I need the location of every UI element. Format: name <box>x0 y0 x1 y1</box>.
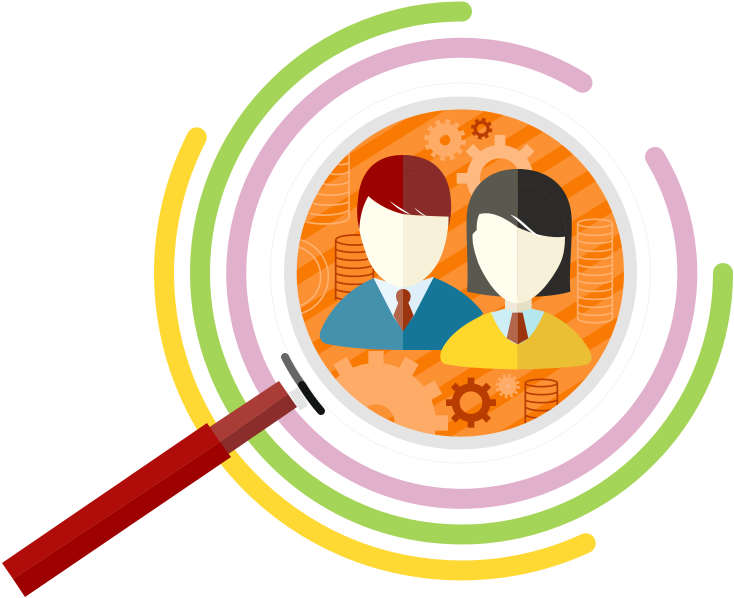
icon: light coin stack right <box>578 219 612 323</box>
man tie <box>393 289 414 332</box>
man face <box>359 196 449 287</box>
lens grey rim <box>290 103 630 443</box>
woman body <box>440 312 592 369</box>
icon: dark coin stack left <box>336 235 373 300</box>
icon: small gear top <box>426 121 464 159</box>
icon: large gear top right <box>457 135 543 205</box>
woman collar <box>491 309 544 344</box>
person: woman <box>440 169 592 369</box>
lens scene <box>296 109 624 437</box>
handle grip <box>2 423 231 597</box>
icon: light coin stack upper left <box>306 153 349 224</box>
icon: large gear bottom left <box>334 351 448 434</box>
woman tie <box>507 313 528 344</box>
magnifier handle <box>2 357 321 597</box>
woman hair highlight <box>511 215 542 237</box>
man sweater <box>320 277 483 350</box>
handle connector <box>289 387 308 411</box>
icon: tiny dark gear top <box>472 119 491 138</box>
arc: pink inner ring <box>236 48 687 499</box>
person: man <box>320 155 483 350</box>
striped orange background <box>296 109 624 437</box>
icon: dark coin stack bottom <box>525 379 557 427</box>
handle neck <box>208 381 297 455</box>
man hair <box>357 155 451 229</box>
arc: green middle ring <box>200 11 723 534</box>
icon: dark gear bottom <box>446 378 496 428</box>
icon: small light gear bottom <box>497 375 518 397</box>
woman neck <box>505 297 532 313</box>
lens faint outline <box>270 83 650 463</box>
woman face <box>472 213 565 303</box>
lens clip grey and black <box>285 357 321 411</box>
man collar <box>373 277 434 331</box>
woman hair <box>467 169 572 297</box>
icon: concentric circle left <box>298 239 330 314</box>
arc: yellow outer ring <box>164 137 586 570</box>
